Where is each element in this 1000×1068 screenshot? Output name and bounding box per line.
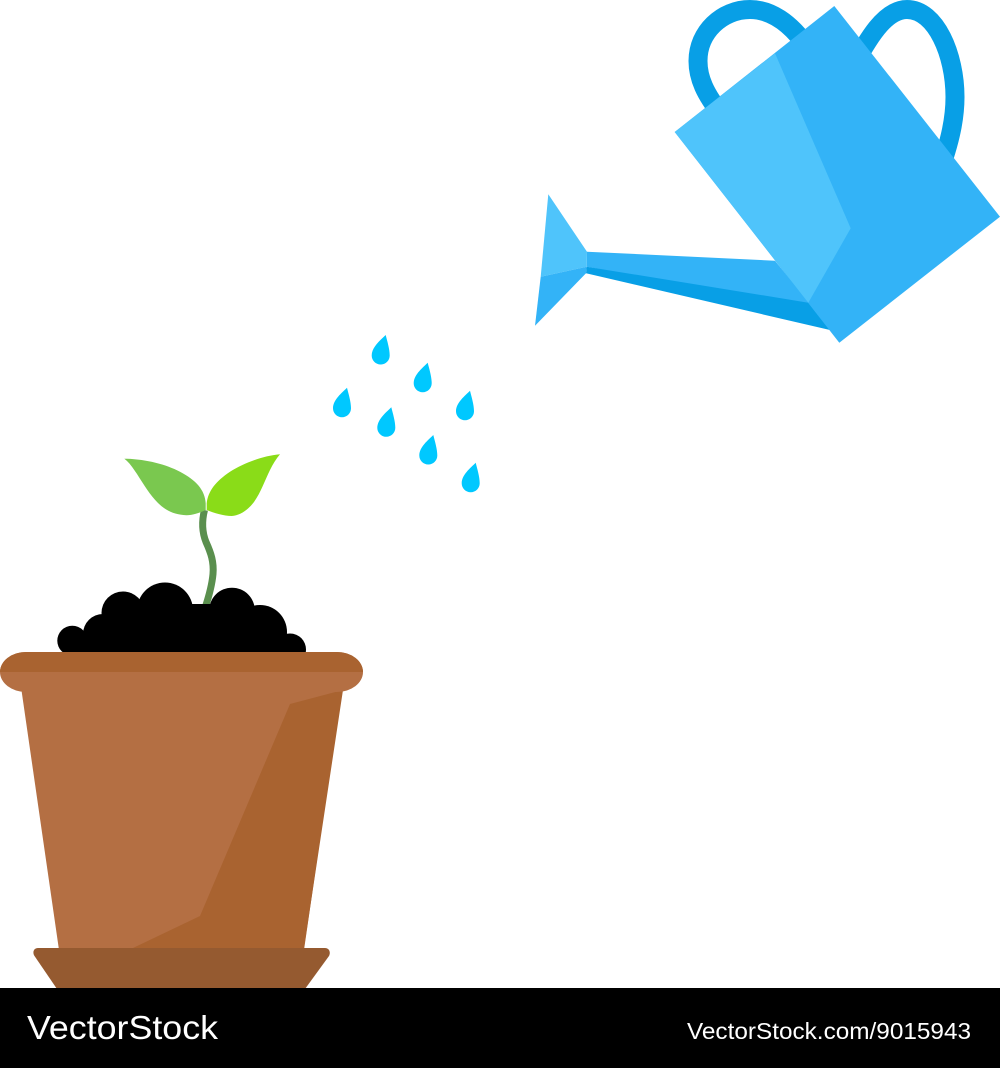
icon: stem <box>203 510 213 608</box>
seedling <box>124 454 280 608</box>
soil <box>57 582 306 652</box>
watering can <box>535 6 1000 343</box>
flower pot <box>0 652 363 989</box>
icon: can spout <box>586 252 830 330</box>
pot rim <box>0 652 363 692</box>
pot body <box>20 680 343 950</box>
water drops <box>333 335 480 492</box>
brand name: VectorStock <box>27 1010 218 1047</box>
pot saucer <box>33 948 330 989</box>
pot shadow <box>133 690 343 948</box>
icon: right leaf <box>207 454 280 516</box>
icon: left leaf <box>124 459 206 515</box>
icon: can sprinkler head <box>535 194 587 326</box>
icon: can body <box>675 6 1000 343</box>
footer band <box>0 988 1000 1068</box>
image id url: VectorStock.com/9015943 <box>687 1018 971 1044</box>
icon: can handles <box>698 10 955 175</box>
